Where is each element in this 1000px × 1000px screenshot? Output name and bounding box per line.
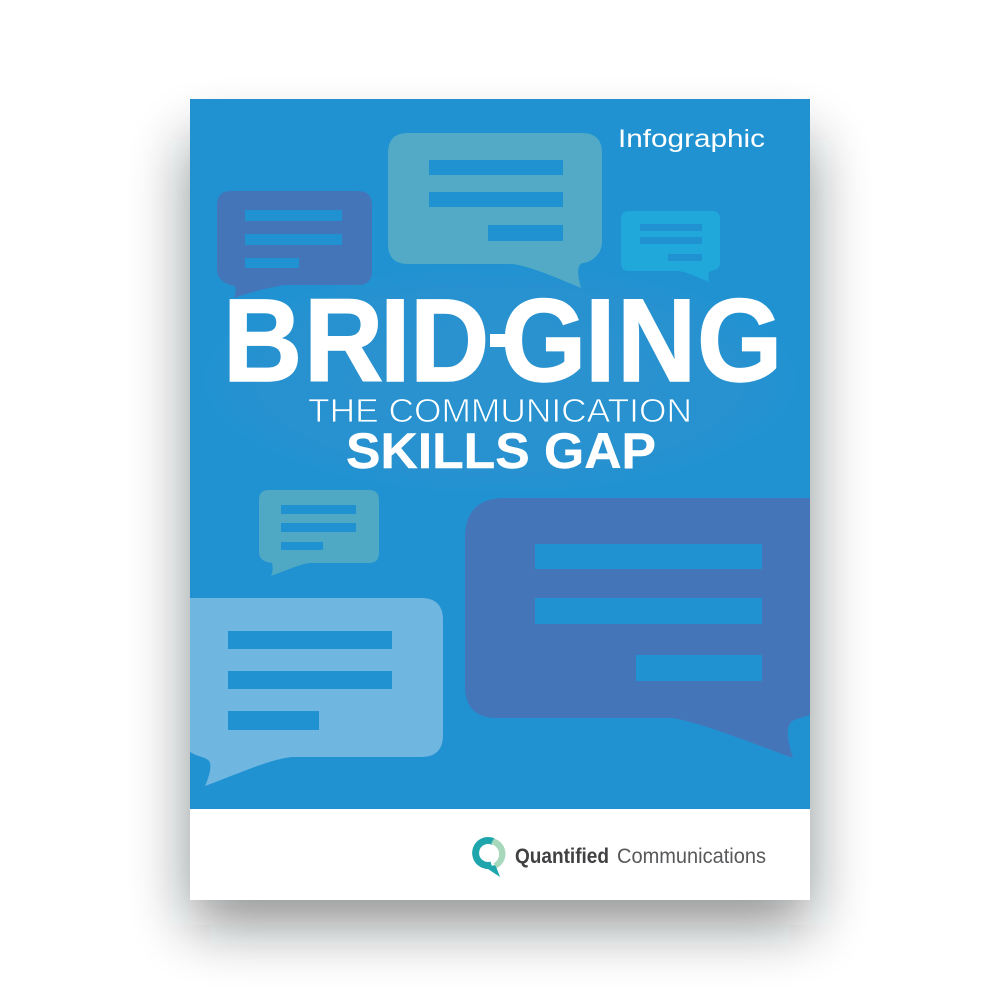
logo wordmark: Quantified	[515, 845, 609, 868]
footer white band	[190, 809, 810, 900]
logo wordmark: Communications	[617, 845, 766, 868]
speech bubble: dark blue top left	[217, 191, 372, 298]
label: Infographic: Infographic	[618, 125, 765, 153]
subtitle: THE COMMUNICATION: THE COMMUNICATION	[308, 393, 692, 430]
logo wordmark	[515, 845, 766, 868]
drop shadow of the cover	[190, 140, 810, 925]
speech bubble: teal small left	[259, 490, 379, 576]
speech bubble: bright blue top right	[621, 211, 720, 282]
blue cover background	[190, 99, 810, 809]
soft glow behind title	[200, 265, 800, 495]
speech bubble: large dark blue right	[465, 498, 810, 758]
speech bubble: light blue bottom left	[190, 598, 443, 786]
logo: Quantified Communications	[476, 838, 766, 877]
cover panel	[190, 99, 810, 900]
title: BRIDGING: BRIDGING	[223, 275, 782, 407]
speech bubble: teal top centre	[388, 133, 602, 288]
subtitle: SKILLS GAP: SKILLS GAP	[346, 423, 656, 479]
icon: Q speech ring	[476, 838, 506, 877]
